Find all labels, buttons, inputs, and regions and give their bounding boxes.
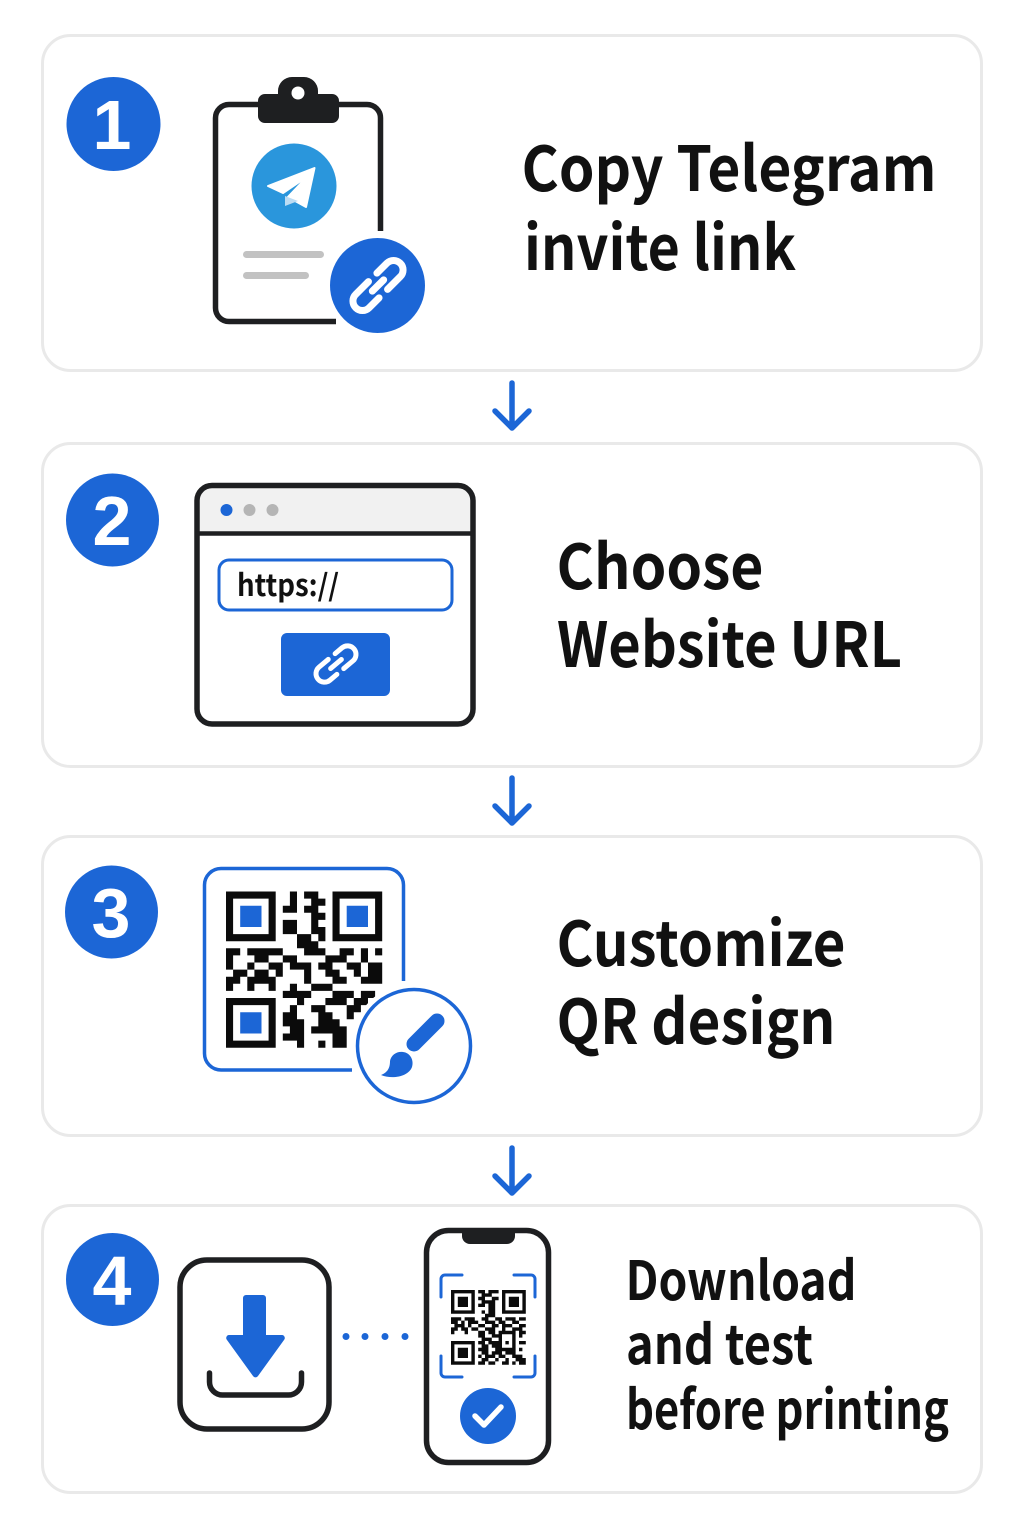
step 2 label: Website URL	[557, 595, 902, 685]
step 1 number badge: 1	[93, 86, 131, 164]
step 4 label: Download	[626, 1237, 856, 1316]
step 3 number badge: 3	[92, 874, 130, 952]
step 4 number badge	[66, 1233, 159, 1326]
arrow: step 2 to 3	[495, 778, 529, 823]
arrow: step 3 to 4	[495, 1148, 529, 1193]
step 1 label: invite link	[524, 198, 796, 288]
icon: download box	[180, 1260, 329, 1429]
QR code modules	[226, 892, 382, 1048]
step 2 label: Choose	[556, 517, 764, 607]
panel: step 4	[42, 1206, 982, 1492]
arrow: step 1 to 2	[495, 383, 529, 428]
phone QR modules	[451, 1290, 526, 1365]
icon: clipboard with Telegram logo and link	[216, 77, 425, 333]
step 3 number badge	[65, 866, 158, 958]
panel: step 3	[42, 836, 982, 1136]
step 4 label: and test	[626, 1301, 813, 1380]
panel: step 1	[42, 36, 982, 370]
step 2 number badge: 2	[93, 482, 131, 560]
dotted connector	[342, 1333, 408, 1340]
step 3 label: Customize	[556, 894, 846, 984]
icon: browser window with URL field	[197, 486, 473, 724]
panel: step 2	[42, 444, 982, 766]
icon: browser window with URL field: https://	[237, 561, 339, 605]
step 4 label	[626, 1237, 949, 1445]
step 2 label	[556, 517, 902, 685]
icon: QR code with paintbrush	[204, 868, 477, 1109]
icon: phone scanning QR code	[426, 1230, 548, 1462]
step 1 label: Copy Telegram	[522, 119, 936, 209]
step 2 number badge	[66, 474, 159, 566]
step 1 number badge	[66, 77, 160, 171]
step 4 label: before printing	[626, 1366, 949, 1445]
step 1 label	[522, 119, 936, 288]
step 3 label: QR design	[556, 972, 836, 1062]
step 3 label	[556, 894, 846, 1062]
step 4 number badge: 4	[93, 1242, 132, 1320]
